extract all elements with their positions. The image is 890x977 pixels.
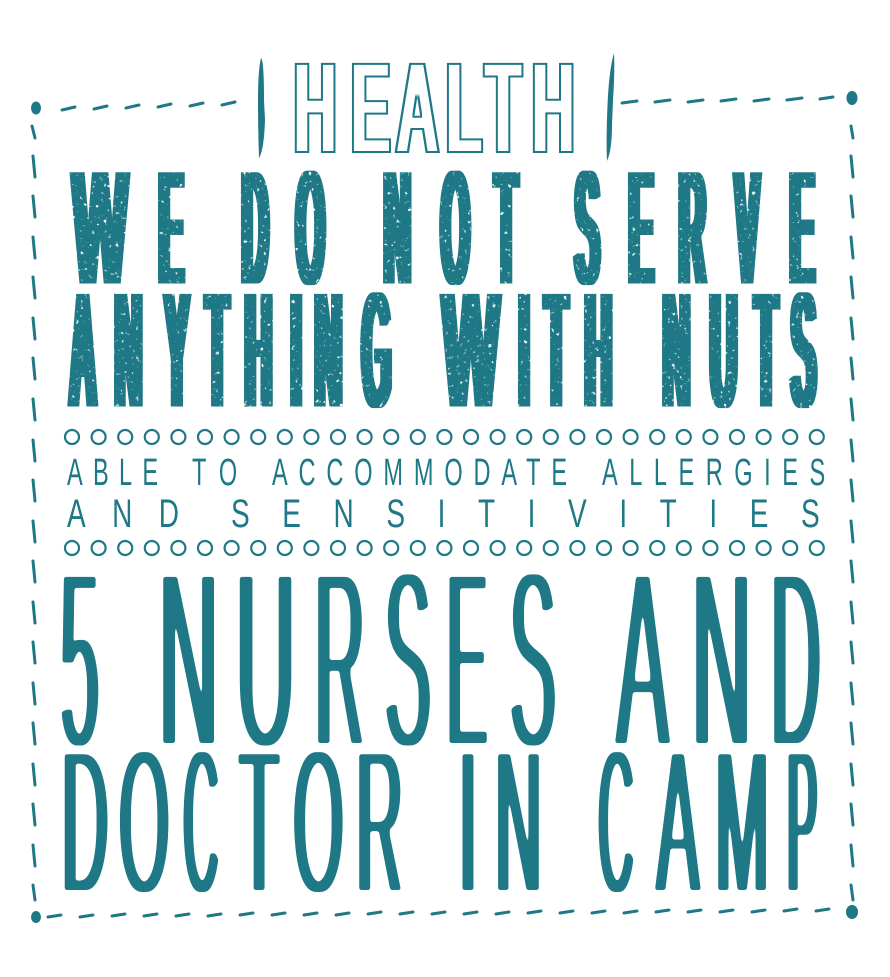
lower row of circles — [65, 541, 824, 555]
subheading: Able to accommodate allergies: ALLERGIES — [602, 450, 825, 493]
subheading: And sensitivities: SENSITIVITIES — [231, 492, 820, 536]
dashed hand-drawn border — [31, 91, 858, 923]
upper row of circles — [65, 430, 824, 444]
headline: Anything with nuts: ANYTHING WITH NUTS — [70, 256, 816, 444]
subheading: Able to accommodate allergies: ABLE — [67, 450, 158, 493]
large text: 5 nurses and: 5 NURSES AND — [61, 519, 820, 802]
subheading: Able to accommodate allergies: ACCOMMODATE — [272, 450, 567, 493]
right bar beside heading — [607, 53, 614, 161]
left bar beside heading — [258, 58, 265, 158]
subheading: And sensitivities: AND — [67, 492, 179, 536]
heading: Health: HEALTH — [294, 34, 574, 181]
large text: doctor in camp: DOCTOR IN CAMP — [62, 708, 817, 938]
subheading: Able to accommodate allergies — [67, 450, 825, 493]
headline: We do not serve: W E DO NOT SERVE — [73, 136, 814, 321]
subheading: Able to accommodate allergies: TO — [192, 450, 237, 493]
